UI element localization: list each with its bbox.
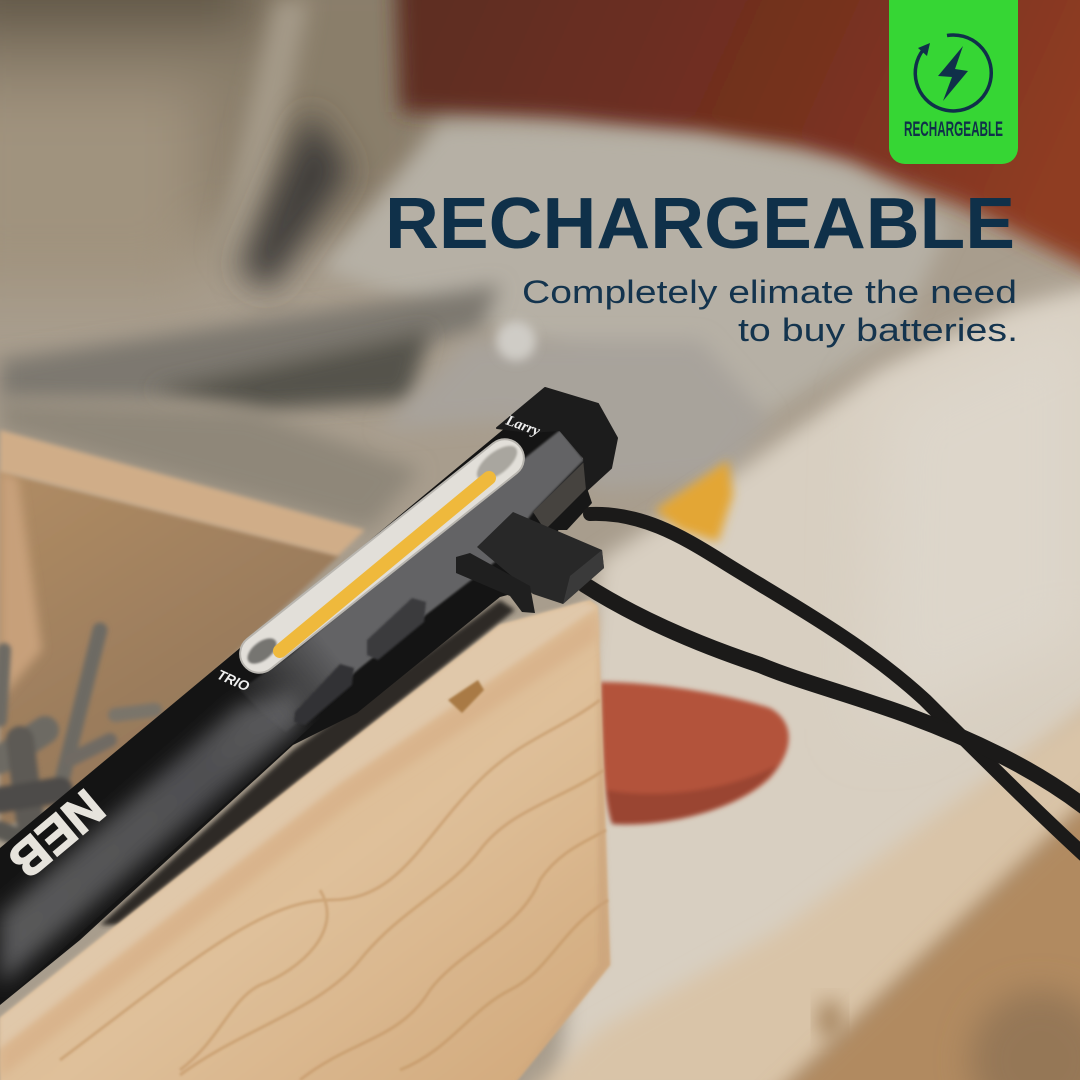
icon: arrow head [918, 43, 930, 56]
USB cables [585, 514, 1080, 865]
subtext: Completely elimate the need [522, 274, 1017, 310]
model text TRIO: TRIO [215, 666, 252, 694]
subtext: to buy batteries. [738, 312, 1018, 348]
icon: charging circle arrow [915, 35, 991, 111]
icon: lightning bolt [938, 46, 968, 101]
yellow LED strip [280, 478, 489, 651]
USB plug [456, 512, 604, 613]
red tape measure [600, 682, 789, 825]
black head cap [497, 388, 617, 490]
wooden box: front face [0, 600, 610, 1080]
screws in box [0, 630, 155, 840]
lens right shade [471, 440, 523, 486]
head underside [545, 488, 592, 530]
penlight [0, 388, 617, 1005]
brand text NEB: NEB [0, 779, 115, 889]
signature text: Larry [503, 412, 542, 440]
crumbly dark band under pen [100, 600, 515, 925]
table surface [520, 280, 1080, 1080]
lens [232, 432, 532, 680]
badge label: RECHARGEABLE [904, 118, 1003, 141]
brushed grey top surface [240, 430, 584, 732]
wooden box: interior [0, 430, 365, 830]
wood grain [60, 700, 608, 1080]
buttons [367, 598, 426, 660]
rubber flap [456, 553, 535, 613]
blurred yellow tool and highlight [496, 321, 733, 542]
pen body black [0, 400, 590, 1005]
lens left shade [243, 633, 281, 669]
subtext [522, 274, 1018, 348]
rim [0, 602, 597, 1050]
badge: rechargeable [889, 0, 1018, 164]
pen barrel highlight [0, 690, 300, 985]
clip striped side [533, 462, 588, 530]
heading: RECHARGEABLE [385, 184, 1015, 264]
